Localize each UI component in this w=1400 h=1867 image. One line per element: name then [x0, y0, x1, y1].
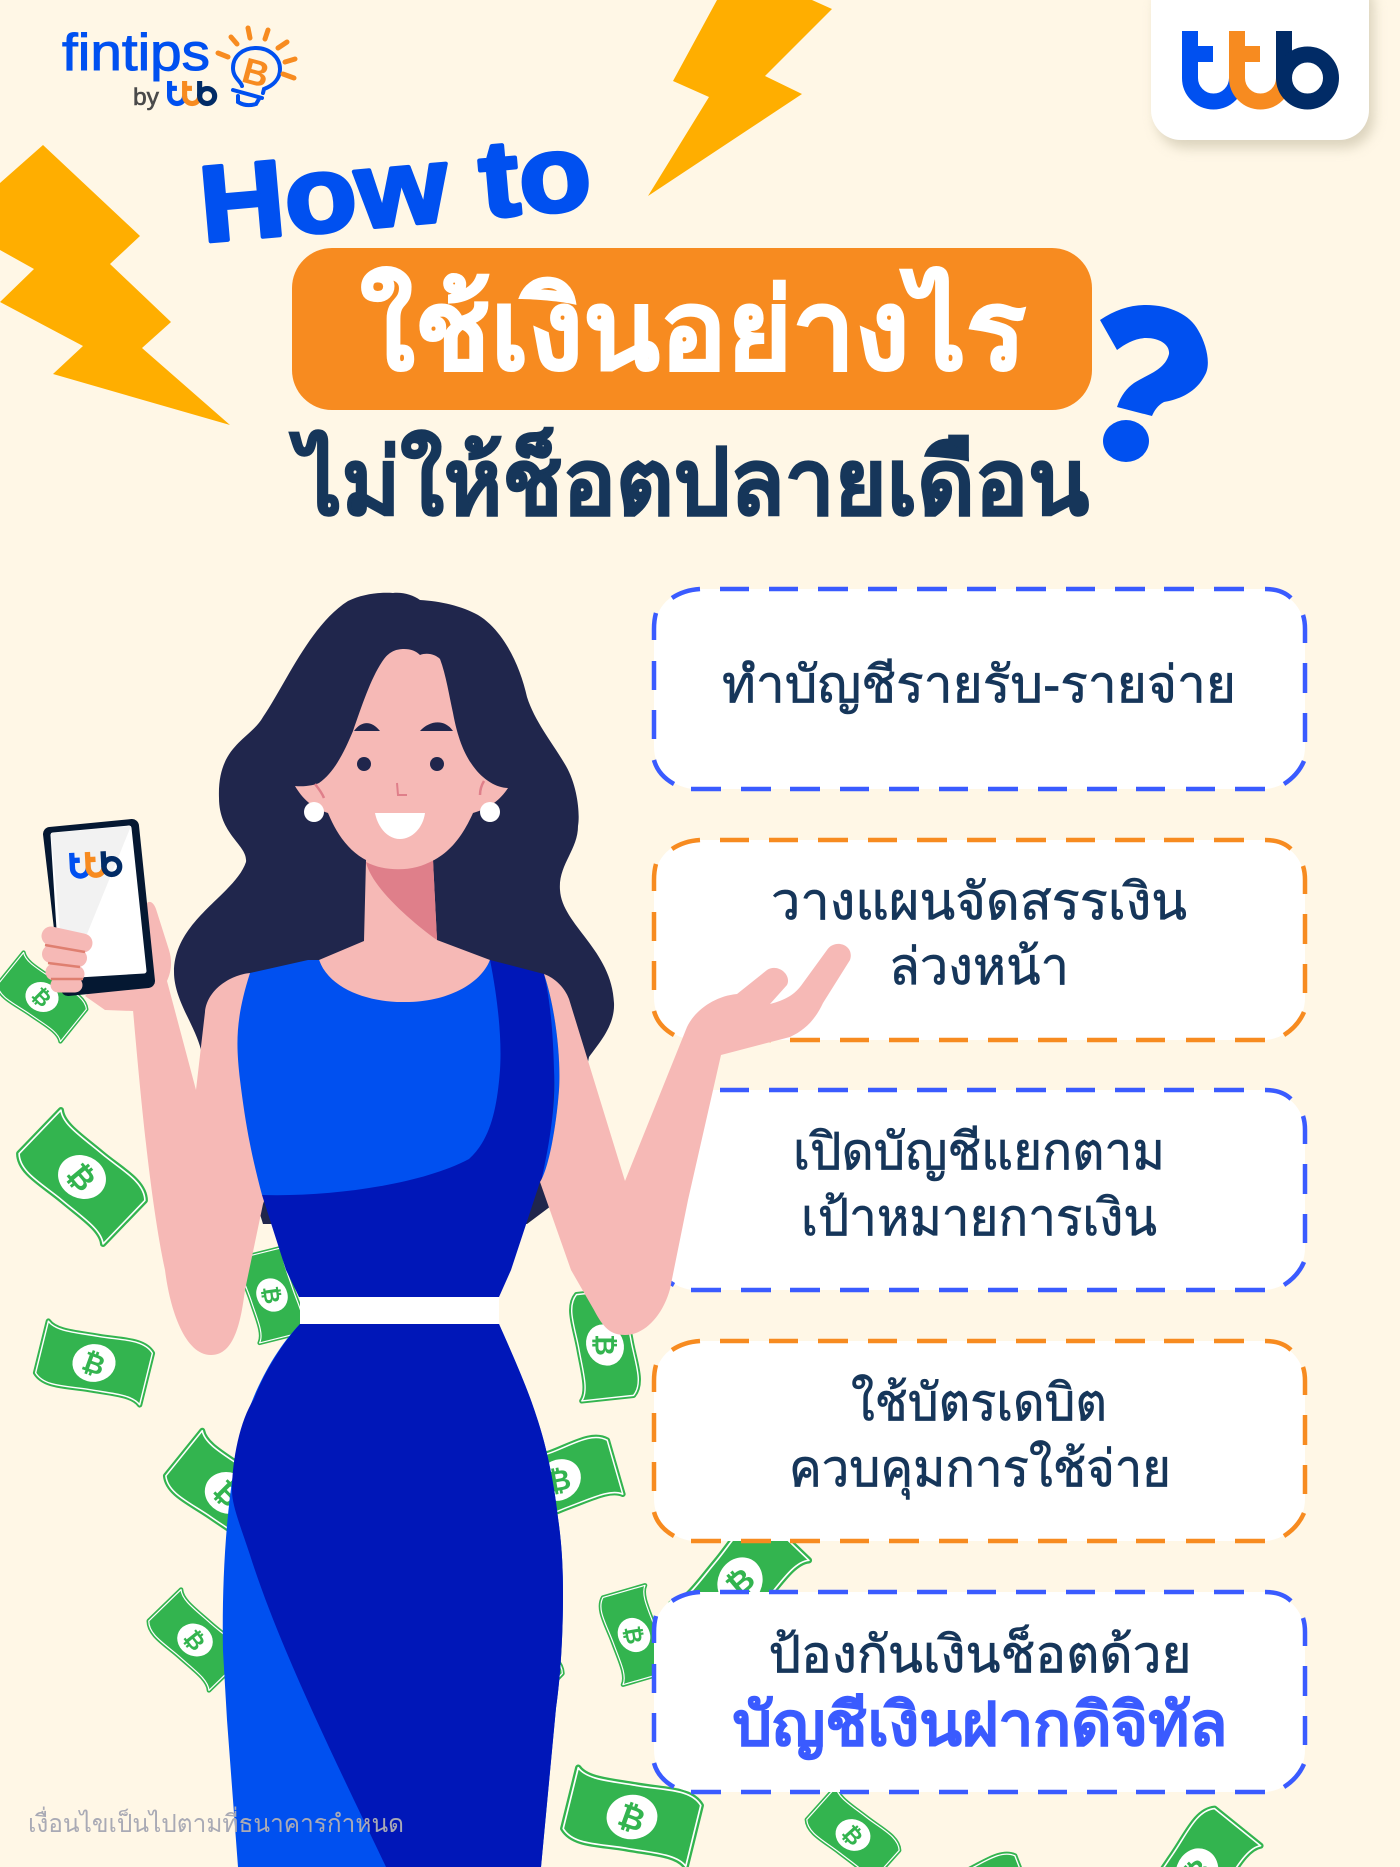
heading: orange pill [292, 248, 1092, 410]
right arm and hand [540, 944, 851, 1335]
money: falling bills: ₿ [545, 1463, 573, 1499]
panel: step 3: เป้าหมายการเงิน [801, 1189, 1157, 1246]
ear details [315, 781, 484, 798]
logo: ttb card [1151, 0, 1374, 148]
logo: fintips by ttb: by [133, 84, 159, 111]
money: falling bills: ₿ [78, 1346, 109, 1383]
title: How to: How to [194, 110, 596, 265]
footnote: เงื่อนไขเป็นไปตามที่ธนาคารกำหนด [28, 1806, 404, 1838]
phone [50, 826, 148, 989]
illustration: woman holding phone [45, 593, 851, 1867]
face [295, 649, 508, 868]
panel: step 3 [654, 1090, 1305, 1290]
money: falling bills: ₿ [178, 1626, 210, 1656]
belt [300, 1297, 499, 1324]
panel: step 3: เปิดบัญชีแยกตาม [793, 1123, 1165, 1180]
panel: step 5 [654, 1592, 1305, 1792]
icon: light bulb: B [238, 49, 274, 96]
panel: step 1 [654, 589, 1305, 789]
money: falling bills: ₿ [257, 1285, 284, 1306]
panel: step 2: ล่วงหน้า [889, 938, 1069, 995]
heading: second line: ไม่ให้ช็อตปลายเดือน [288, 427, 1089, 534]
panel: step 2: วางแผนจัดสรรเงิน [771, 873, 1187, 930]
money: falling bills: ₿ [720, 1561, 762, 1605]
logo: fintips by ttb: fintips [62, 24, 210, 82]
hair [174, 593, 614, 1224]
earrings [304, 802, 500, 822]
panel: step 5: บัญชีเงินฝากดิจิทัล [732, 1691, 1228, 1760]
panel: step 4: ใช้บัตรเดบิต [851, 1374, 1107, 1431]
money: falling bills: ₿ [59, 1157, 102, 1199]
icon: question mark [1100, 305, 1208, 462]
panel: step 1: ทำบัญชีรายรับ-รายจ่าย [722, 656, 1236, 713]
neck shadow [366, 860, 437, 940]
money: falling bills: ₿ [207, 1473, 248, 1514]
money: falling bills: ₿ [836, 1820, 868, 1851]
money: falling bills: ₿ [588, 1334, 619, 1356]
icon: lightning bolt left [0, 145, 230, 425]
skirt [223, 1324, 563, 1867]
money: falling bills: ₿ [613, 1796, 650, 1840]
eyes [357, 757, 444, 771]
money: falling bills [0, 951, 1263, 1867]
icon: light bulb [218, 28, 295, 105]
left arm [133, 902, 300, 1355]
logo: fintips by ttb [62, 24, 295, 111]
eyebrows [354, 722, 453, 731]
panel: step 5: ป้องกันเงินช็อตด้วย [768, 1625, 1192, 1683]
palm [85, 960, 160, 1011]
nose [397, 783, 407, 795]
money: falling bills: ₿ [27, 983, 56, 1012]
fingers [45, 936, 85, 985]
money: falling bills: ₿ [619, 1624, 647, 1646]
icon: lightning bolt top [648, 0, 832, 196]
panel: step 4 [654, 1341, 1305, 1541]
panel: step 4: ควบคุมการใช้จ่าย [789, 1440, 1171, 1500]
heading: orange pill: ใช้เงินอย่างไร [360, 267, 1026, 393]
neck and chest [319, 860, 490, 1010]
mouth [375, 813, 425, 839]
dress bodice [262, 960, 555, 1297]
panel: step 2 [654, 840, 1305, 1040]
